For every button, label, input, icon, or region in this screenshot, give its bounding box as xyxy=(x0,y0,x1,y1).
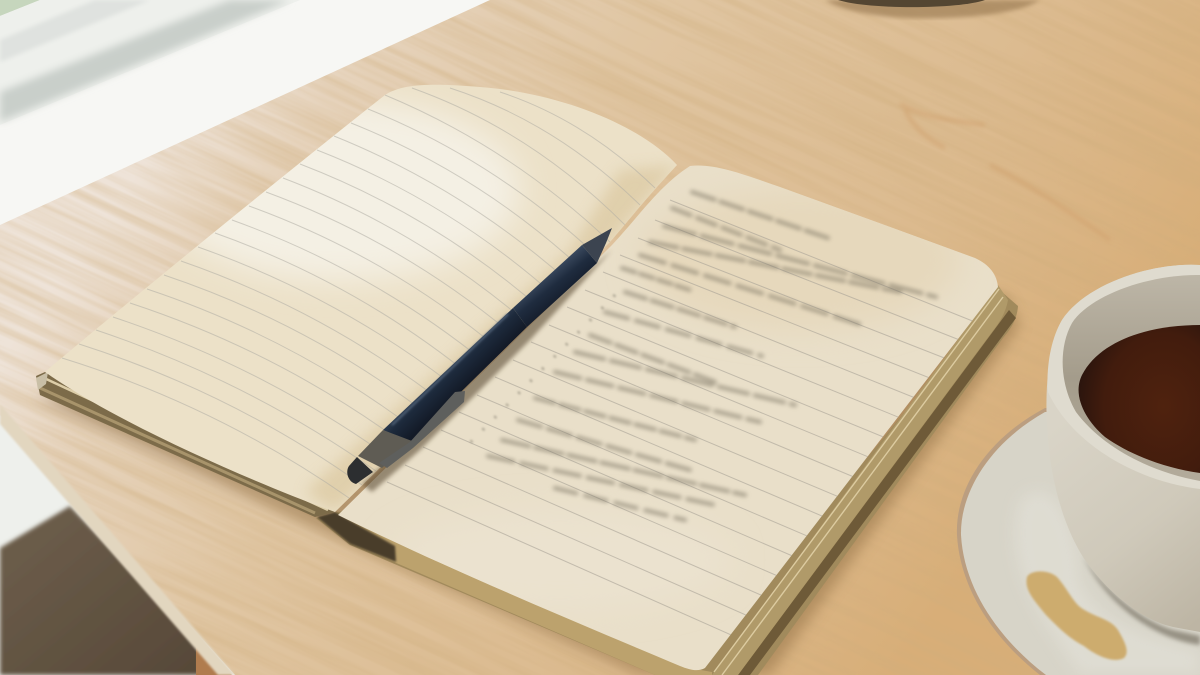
page light and shade xyxy=(650,196,950,324)
left page xyxy=(45,85,677,512)
cup body xyxy=(1046,265,1200,632)
right page xyxy=(338,166,998,670)
background: floor beneath table xyxy=(0,405,240,675)
pen clip xyxy=(379,391,465,468)
cup inner wall xyxy=(1063,275,1200,481)
notebook xyxy=(35,85,1020,675)
handwritten notes (illegible, blurred) xyxy=(488,192,936,520)
notebook shadow xyxy=(35,295,1020,675)
page light and shade xyxy=(160,100,520,280)
tea stain on saucer xyxy=(1026,571,1127,660)
pen lower barrel xyxy=(383,308,527,442)
pen grip xyxy=(358,430,412,468)
numbered margin ticks xyxy=(465,295,615,448)
pen tip xyxy=(582,228,612,263)
saucer xyxy=(957,408,1200,675)
cup rim xyxy=(1048,265,1200,489)
pen end xyxy=(347,457,373,484)
dish at top edge xyxy=(825,0,1040,18)
cup contact shadow xyxy=(1083,557,1200,645)
back cover and right page block xyxy=(316,293,1018,675)
tea xyxy=(1079,325,1200,473)
pen shadow xyxy=(362,250,612,492)
left page block xyxy=(36,372,335,517)
table front edge xyxy=(0,404,235,675)
teacup xyxy=(1046,265,1200,645)
pen upper barrel xyxy=(513,245,597,327)
pen xyxy=(347,228,612,492)
wood knot xyxy=(900,104,1110,240)
